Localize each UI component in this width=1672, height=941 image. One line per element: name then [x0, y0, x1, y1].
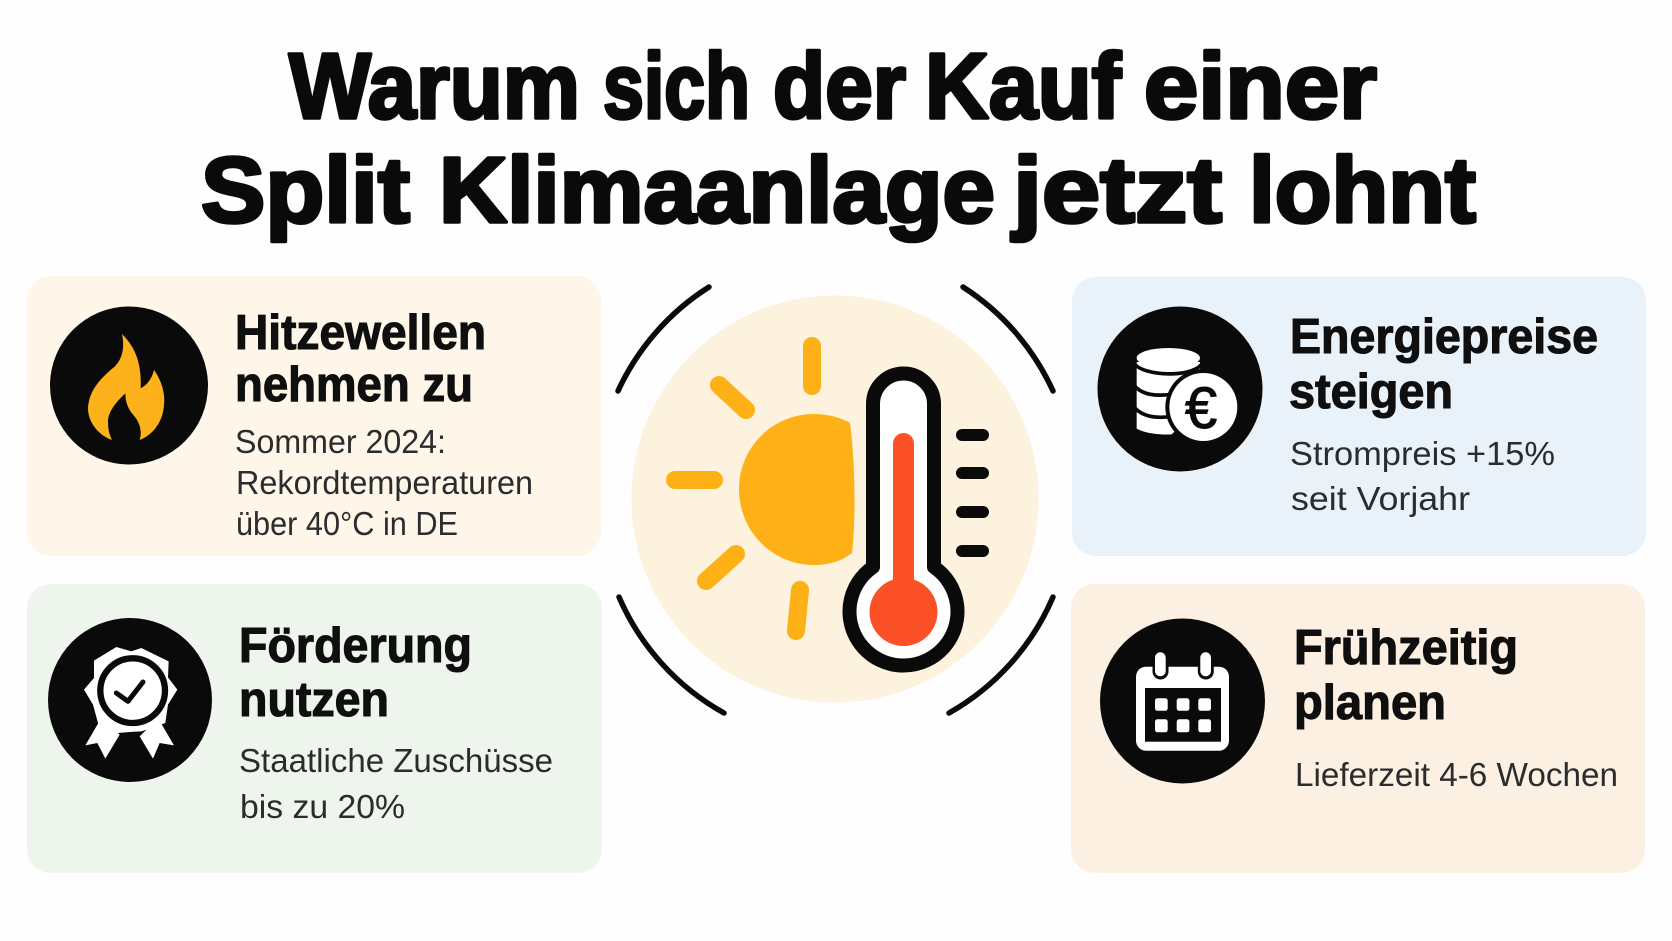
- title: jetzt: [1011, 138, 1222, 242]
- text: Staatliche Zuschüsse: [239, 742, 553, 825]
- text: Strompreis: Strompreis +15%: [1290, 435, 1555, 472]
- panel: Hitzewellen: [27, 276, 601, 556]
- icon: coins with euro: [1098, 306, 1262, 472]
- panel: Energiepreise: [1072, 277, 1646, 556]
- heading: Frühzeitig planen: [1294, 621, 1518, 730]
- title: Klimaanlage: [439, 138, 995, 242]
- title: der: [773, 34, 906, 138]
- icon: award badge: [48, 618, 212, 782]
- text: Strompreis: seit Vorjahr: [1291, 480, 1470, 517]
- text: Sommer 2024: [235, 423, 533, 542]
- heading: Energiepreise steigen: Energiepreise: [1290, 310, 1598, 364]
- central illustration: sun and thermometer: [618, 287, 1053, 713]
- icon: thermometer: [850, 373, 989, 666]
- icon: coins with euro: €: [1185, 376, 1217, 441]
- heading: Förderung nutzen: [239, 619, 472, 727]
- title: Warum: [289, 34, 580, 138]
- panel: Frühzeitig planen: [1071, 584, 1645, 873]
- heading: Förderung nutzen: Förderung: [239, 619, 472, 673]
- text: Lieferzeit: Lieferzeit 4-6 Wochen: [1295, 756, 1618, 793]
- title: Split: [201, 138, 410, 242]
- heading: Hitzewellen nehmen zu: Hitzewellen: [235, 306, 486, 360]
- title: Kauf: [925, 34, 1122, 138]
- text: Sommer 2024: Sommer 2024:: [235, 423, 446, 460]
- arcs around circle: [618, 287, 1053, 713]
- heading: Förderung nutzen: nutzen: [239, 673, 389, 727]
- heading: Frühzeitig planen: planen: [1294, 676, 1446, 730]
- title: lohnt: [1249, 138, 1476, 242]
- heading: Frühzeitig planen: Frühzeitig: [1294, 621, 1518, 675]
- heading: Energiepreise steigen: [1289, 310, 1598, 419]
- panel: Förderung: [27, 584, 602, 873]
- text: Staatliche Zuschüsse: bis zu 20%: [240, 788, 405, 825]
- heading: Energiepreise steigen: steigen: [1289, 365, 1453, 419]
- icon: sun: [675, 346, 854, 631]
- text: Strompreis: [1290, 435, 1555, 517]
- icon: calendar: [1100, 618, 1265, 784]
- title: sich: [603, 34, 750, 138]
- title: [201, 34, 1476, 242]
- title: einer: [1144, 34, 1377, 138]
- heading: Hitzewellen nehmen zu: [235, 306, 486, 412]
- text: Staatliche Zuschüsse: Staatliche Zuschüsse: [239, 742, 553, 779]
- heading: Hitzewellen nehmen zu: nehmen zu: [235, 358, 473, 412]
- icon: flame: [50, 306, 208, 464]
- text: Sommer 2024: über 40°C in DE: [236, 505, 458, 542]
- text: Sommer 2024: Rekordtemperaturen: [236, 464, 533, 501]
